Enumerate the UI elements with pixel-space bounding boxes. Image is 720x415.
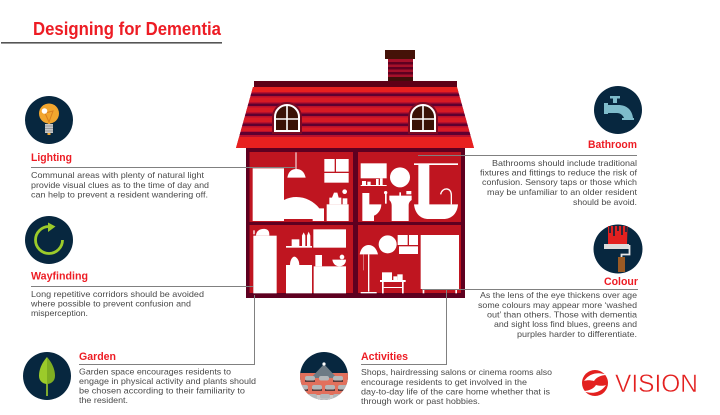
bedroom [253, 152, 349, 221]
text block: through work or past hobbies. [361, 396, 480, 406]
text block: the resident. [79, 395, 128, 405]
heading: Bathroom [588, 139, 637, 151]
text block: provide visual clues as to the time of day and [31, 180, 209, 190]
icon: light bulb [25, 96, 73, 144]
text block: out’ than others. Those with dementia [487, 310, 637, 320]
text block: can help to prevent a resident wandering off. [31, 190, 208, 200]
text block: Bathrooms should include traditional [492, 158, 637, 168]
heading: Wayfinding [31, 270, 88, 282]
icon: cinema seats [298, 352, 348, 401]
text block: As the lens of the eye thickens over age [480, 290, 637, 300]
panel: lighting [25, 96, 209, 200]
text block: day-to-day life of the care home whether that is [361, 386, 550, 396]
house walls [246, 148, 465, 298]
heading: Activities [361, 351, 408, 363]
text block: misperception. [31, 308, 88, 318]
panel: colour [478, 224, 642, 339]
icon: tap [594, 86, 642, 134]
text block: where possible to prevent confusion and [30, 298, 191, 308]
text block: may be unfamiliar to an older resident [487, 187, 638, 197]
rooms [250, 152, 461, 293]
icon: leaf [23, 352, 71, 400]
text block: encourage residents to get involved in the [361, 377, 527, 387]
text block [478, 290, 637, 339]
text block [361, 367, 552, 406]
text block: Long repetitive corridors should be avoided [31, 289, 204, 299]
text block [79, 366, 256, 405]
text block: Shops, hairdressing salons or cinema rooms also [361, 367, 552, 377]
roof window right [408, 102, 438, 134]
kitchen [253, 229, 346, 293]
chimney [385, 50, 415, 81]
text block: purples harder to differentiate. [517, 329, 637, 339]
panel: garden [23, 351, 256, 405]
text block: some colours may appear more ‘washed [478, 300, 637, 310]
text block: Communal areas with plenty of natural light [31, 170, 205, 180]
heading: Lighting [31, 152, 72, 164]
roof [230, 81, 480, 148]
icon: circular arrow [25, 216, 73, 264]
text block: and sight loss find blues, greens and [494, 319, 637, 329]
panel: wayfinding [25, 216, 204, 318]
heading: Garden [79, 351, 116, 363]
text block [30, 289, 204, 318]
text block [480, 158, 638, 207]
living room [360, 235, 459, 293]
panel: activities [298, 351, 552, 406]
leader lines [31, 156, 638, 364]
text block: be chosen according to their familiarity to [79, 386, 245, 396]
text block: fixtures and fittings to reduce the risk of [480, 168, 638, 178]
heading: Colour [604, 276, 639, 288]
illustration: house cross-section [230, 50, 480, 298]
panel: bathroom [480, 86, 642, 207]
text block [31, 170, 209, 200]
text block: Garden space encourages residents to [79, 366, 231, 376]
text block: confusion. Sensory taps or those which [482, 177, 637, 187]
bathroom [361, 163, 458, 221]
text block: should be avoid. [573, 197, 637, 207]
roof window left [272, 102, 302, 134]
logo: Vision: VISION [615, 370, 698, 398]
furniture silhouettes [253, 152, 459, 293]
title: Designing for Dementia [33, 18, 222, 39]
text block: engage in physical activity and plants should [79, 376, 256, 386]
icon: paint roller [594, 224, 642, 274]
